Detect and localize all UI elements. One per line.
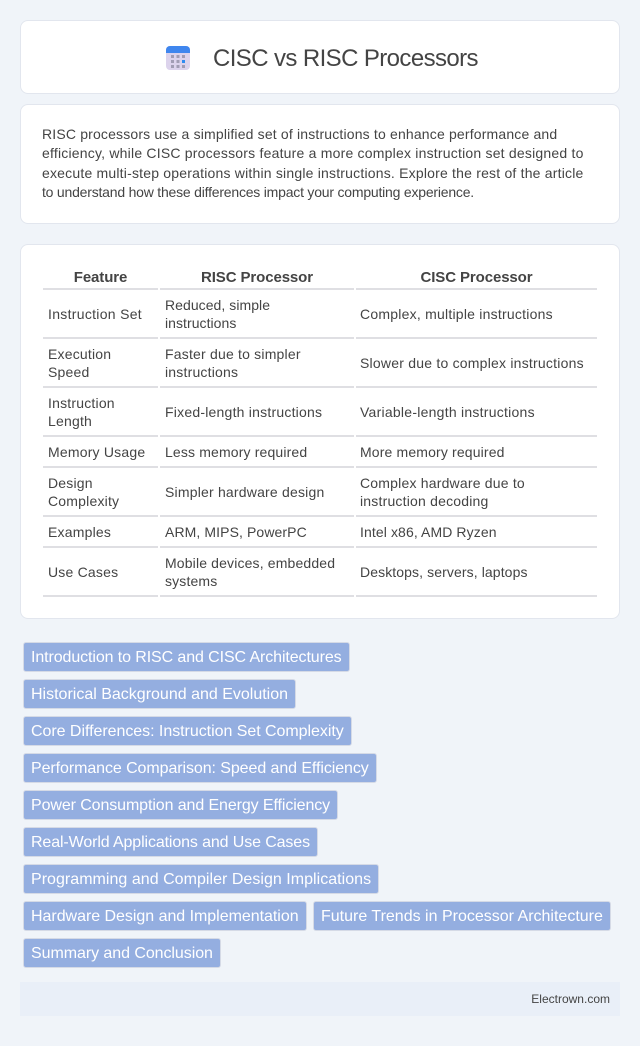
link pill (23, 753, 377, 783)
link pill (23, 679, 296, 709)
row: Instruction Set: Instruction Set (48, 306, 142, 322)
panel: intro text (20, 104, 620, 224)
table header: RISC Processor: RISC Processor (201, 269, 313, 286)
row: Use Cases: Use Cases (48, 564, 118, 580)
row: Design Complexity: Complexity (48, 493, 119, 509)
cell: Slower due to complex instructions (360, 355, 584, 371)
link pill: Hardware Design and Implementation (31, 908, 299, 925)
row: Execution Speed (48, 346, 111, 380)
link pill: Performance Comparison: Speed and Efficiency (31, 760, 369, 777)
cell: Reduced, simple (165, 297, 270, 313)
row: Instruction Length (48, 395, 115, 429)
cell: instruction decoding (360, 493, 489, 509)
panel: header (20, 20, 620, 94)
cell: Desktops, servers, laptops (360, 564, 528, 580)
link pill (23, 827, 318, 857)
link pill (23, 938, 221, 968)
link pill: Introduction to RISC and CISC Architectures (31, 649, 342, 666)
cell: Faster due to simpler (165, 346, 301, 362)
cell: instructions (165, 364, 238, 380)
table header: Feature: Feature (74, 269, 127, 286)
cell: Variable-length instructions (360, 404, 535, 420)
cell: More memory required (360, 444, 505, 460)
cell: Complex hardware due to (360, 475, 525, 491)
title: CISC vs RISC Processors (213, 45, 478, 72)
cell: Intel x86, AMD Ryzen (360, 524, 497, 540)
link pill: Core Differences: Instruction Set Complexity (31, 723, 344, 740)
row: Instruction Length: Instruction (48, 395, 115, 411)
cell: Fixed-length instructions (165, 404, 322, 420)
panel: comparison table (20, 244, 620, 619)
intro paragraph: to understand how these differences impact your computing experience. (42, 184, 474, 200)
table header: CISC Processor: CISC Processor (420, 269, 532, 286)
cell: instructions (165, 315, 236, 331)
cell: Complex, multiple instructions (360, 306, 553, 322)
row: Design Complexity (48, 475, 119, 509)
cell (360, 475, 525, 509)
row: Memory Usage: Memory Usage (48, 444, 145, 460)
link pill: Future Trends in Processor Architecture (321, 908, 603, 925)
row: Execution Speed: Speed (48, 364, 89, 380)
link pill (23, 716, 352, 746)
cell (165, 346, 301, 380)
cell: Simpler hardware design (165, 484, 324, 500)
cell: Less memory required (165, 444, 307, 460)
footer (20, 982, 620, 1016)
footer: Electrown.com (531, 992, 610, 1006)
cell: systems (165, 573, 217, 589)
cell: Mobile devices, embedded (165, 555, 335, 571)
row: Design Complexity: Design (48, 475, 93, 491)
link pill: Summary and Conclusion (31, 945, 213, 962)
intro paragraph (42, 126, 584, 200)
link pill: Power Consumption and Energy Efficiency (31, 797, 330, 814)
link pill (23, 642, 350, 672)
link pill (23, 790, 338, 820)
cell: ARM, MIPS, PowerPC (165, 524, 307, 540)
cell (165, 555, 335, 589)
link pill (23, 901, 307, 931)
link pill (23, 864, 379, 894)
link pill: Real-World Applications and Use Cases (31, 834, 310, 851)
link pill: Programming and Compiler Design Implications (31, 871, 371, 888)
cell (165, 297, 270, 331)
row: Instruction Length: Length (48, 413, 92, 429)
row: Execution Speed: Execution (48, 346, 111, 362)
row: Examples: Examples (48, 524, 111, 540)
intro paragraph: RISC processors use a simplified set of instructions to enhance performance and (42, 126, 557, 142)
icon: processor calendar grid (166, 46, 190, 70)
link pill (313, 901, 611, 931)
intro paragraph: efficiency, while CISC processors feature a more complex instruction set designed to (42, 145, 584, 161)
intro paragraph: execute multi-step operations within single instructions. Explore the rest of the article (42, 165, 584, 181)
link pill: Historical Background and Evolution (31, 686, 288, 703)
